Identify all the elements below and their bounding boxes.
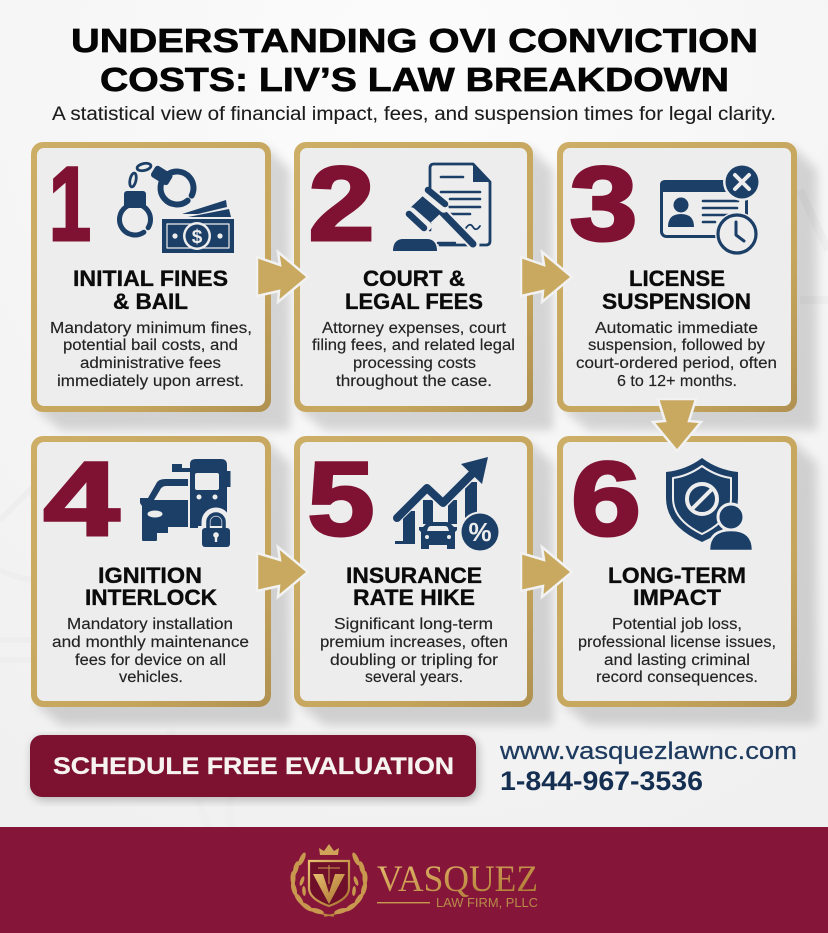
description: record consequences.	[596, 669, 758, 686]
panel: 4 ignition interlock	[31, 436, 290, 725]
description	[578, 616, 776, 686]
heading: SUSPENSION	[602, 289, 751, 314]
title: COSTS: LIV’S LAW BREAKDOWN	[100, 62, 729, 99]
description: Automatic immediate	[595, 320, 758, 337]
heading	[85, 563, 217, 610]
number 2: 2	[308, 146, 374, 263]
description: filing fees, and related legal	[312, 337, 515, 354]
logo crest	[290, 844, 368, 916]
description: Mandatory minimum fines,	[50, 320, 252, 337]
description	[320, 616, 508, 686]
heading: RATE HIKE	[353, 585, 475, 610]
description: and monthly maintenance	[52, 634, 249, 651]
arrow: 4 to 5	[257, 547, 308, 597]
heading	[608, 563, 746, 610]
icon: rising chart, car and percent: %	[468, 517, 492, 547]
description: professional license issues,	[578, 634, 776, 651]
number 5: 5	[308, 441, 374, 558]
arrow: 5 to 6	[521, 547, 572, 597]
heading: COURT &	[363, 266, 465, 291]
icon: handcuffs and cash: $	[192, 227, 203, 248]
description	[50, 320, 252, 390]
number 3: 3	[570, 146, 638, 263]
arrow: 2 to 3	[521, 252, 572, 302]
arrow: 3 to 6	[653, 399, 701, 451]
description: Attorney expenses, court	[322, 320, 507, 337]
description: processing costs	[353, 355, 476, 372]
description: 6 to 12+ months.	[617, 373, 737, 390]
heading	[602, 266, 751, 314]
description: potential bail costs, and	[63, 337, 238, 354]
panel: 5 insurance rate hike	[294, 436, 553, 725]
heading: IMPACT	[633, 585, 722, 610]
heading	[73, 266, 228, 314]
description: administrative fees	[80, 355, 221, 372]
number 4: 4	[44, 441, 120, 558]
icon: gavel and document	[393, 164, 490, 251]
number 1: 1	[49, 146, 91, 263]
title	[71, 23, 758, 99]
icon: car, interlock device and padlock	[140, 459, 234, 551]
panel: 2 court and legal fees	[294, 142, 553, 430]
description: doubling or tripling for	[330, 652, 498, 669]
icon: license with clock and cross	[660, 163, 761, 256]
description	[52, 616, 249, 686]
panel: 3 license suspension	[557, 142, 817, 430]
heading: LICENSE	[629, 266, 725, 291]
description: immediately upon arrest.	[57, 373, 244, 390]
heading: LONG-TERM	[608, 563, 746, 588]
description: fees for device on all	[75, 652, 226, 669]
heading: LEGAL FEES	[345, 289, 483, 314]
description: court-ordered period, often	[576, 355, 777, 372]
number 6: 6	[571, 441, 641, 558]
description: Potential job loss,	[612, 616, 742, 633]
contact details: www.vasquezlawnc.com	[499, 738, 797, 765]
icon: rising chart, car and percent	[395, 457, 500, 552]
logo wordmark: LAW FIRM, PLLC	[436, 896, 538, 910]
description: vehicles.	[119, 669, 183, 686]
panel: 6 long-term impact	[557, 436, 817, 725]
subtitle: A statistical view of financial impact, fees, and suspension times for legal clarity.	[52, 104, 776, 125]
icon: handcuffs and cash	[113, 162, 234, 253]
heading: INTERLOCK	[85, 585, 217, 610]
description	[576, 320, 777, 390]
description: Mandatory installation	[67, 616, 233, 633]
icon: shield with prohibition and person	[666, 458, 753, 551]
footer band	[0, 827, 828, 933]
call-to-action button: SCHEDULE FREE EVALUATION	[53, 753, 454, 780]
heading: & BAIL	[113, 289, 188, 314]
description: several years.	[365, 669, 463, 686]
heading: INITIAL FINES	[73, 266, 228, 291]
description: premium increases, often	[320, 634, 508, 651]
description: and lasting criminal	[604, 652, 750, 669]
title: UNDERSTANDING OVI CONVICTION	[71, 23, 758, 60]
arrow: 1 to 2	[257, 252, 308, 302]
heading	[345, 266, 483, 314]
heading: INSURANCE	[346, 563, 482, 588]
panel: 1 initial fines and bail	[31, 142, 290, 430]
heading: IGNITION	[98, 563, 202, 588]
contact details: 1-844-967-3536	[500, 766, 703, 796]
call-to-action button	[30, 735, 478, 800]
description: suspension, followed by	[588, 337, 765, 354]
description	[312, 320, 515, 390]
logo wordmark: VASQUEZ	[377, 859, 538, 900]
contact details	[499, 738, 797, 796]
heading	[346, 563, 482, 610]
description: throughout the case.	[336, 373, 492, 390]
description: Significant long-term	[334, 616, 493, 633]
